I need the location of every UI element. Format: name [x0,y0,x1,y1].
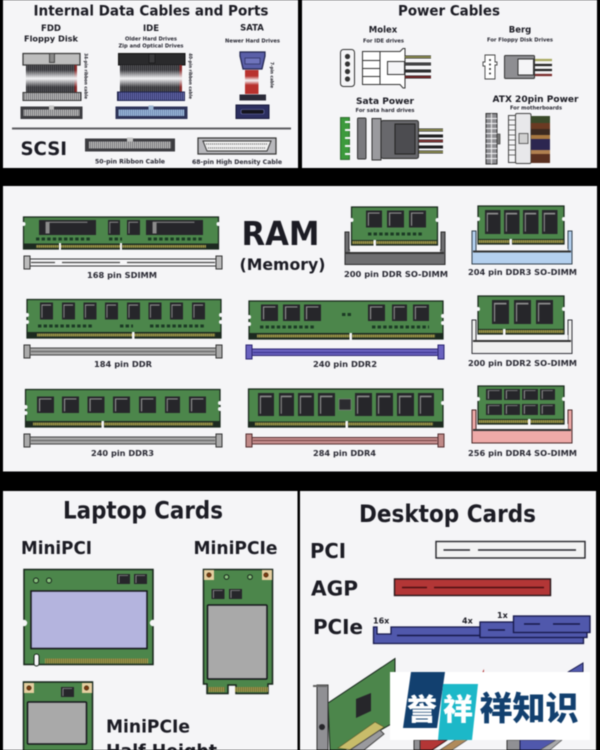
SATA cable and port [236,52,269,118]
card: MiniPCI [21,570,156,666]
label: PCIe: PCIe [313,615,363,639]
logo mark: teal block: 祥 [443,694,473,727]
heading: RAM: RAM [242,214,320,253]
logo mark: blue block: 誉 [407,694,437,727]
card: MiniPCIe [204,570,272,694]
panel: desktop cards [300,491,596,750]
Sata Power labels [356,97,415,114]
Berg labels: For Floppy Disk Drives [487,38,554,44]
ATX labels [492,95,579,112]
FDD cable and port [20,54,82,119]
label: 200 pin DDR2 SO-DIMM: 200 pin DDR2 SO-DIMM [468,359,577,368]
SCSI 50-pin connector [85,138,175,152]
FDD labels [24,24,79,44]
RAM: 168 pin SDIMM [22,217,222,269]
ATX connector [486,114,550,164]
SATA cable note: 7-pin cable [270,62,274,88]
panel: RAM memory [3,186,597,472]
slot: AGP [394,579,550,596]
SATA labels [225,24,281,44]
RAM: 184 pin DDR [24,300,223,358]
watermark logo [390,672,590,740]
label: 16x: 16x [373,616,390,626]
label: AGP: AGP [311,576,358,600]
FDD labels: Floppy Disk [24,34,79,44]
RAM: 240 pin DDR3 [24,390,222,447]
logo mark: teal block [438,684,478,740]
Molex labels: For IDE drives [363,38,405,44]
Molex labels [363,26,405,44]
heading: desktop cards: Desktop Cards [359,500,536,528]
IDE labels [118,24,184,50]
ATX labels: ATX 20pin Power [492,95,579,105]
Sata Power connector [340,118,443,160]
RAM: 204 pin DDR3 SO-DIMM [472,206,572,264]
Sata Power labels: Sata Power [356,97,415,107]
illustration: AGP graphics card [414,669,484,750]
label: MiniPCIe half height: MiniPCIe [106,716,190,738]
IDE labels: Zip and Optical Drives [118,44,184,50]
Berg connector [483,55,552,79]
label: 256 pin DDR4 SO-DIMM: 256 pin DDR4 SO-DIMM [468,449,577,458]
label: MiniPCIe: MiniPCIe [194,538,278,559]
label: PCI: PCI [310,539,346,563]
SCSI heading: SCSI [20,138,67,160]
RAM: 240 pin DDR2 [246,301,445,359]
label: 204 pin DDR3 SO-DIMM: 204 pin DDR3 SO-DIMM [468,268,577,277]
label: MiniPCI: MiniPCI [21,538,92,559]
IDE cable note: 40-pin ribbon cable [188,53,193,99]
RAM: 200 pin DDR SO-DIMM [345,207,445,264]
label: 4x: 4x [462,616,474,626]
card: MiniPCIe half height [24,682,92,750]
panel: power cables [302,0,597,168]
RAM: 284 pin DDR4 [246,389,445,447]
label: 240 pin DDR3: 240 pin DDR3 [91,449,154,458]
subheading: Memory: (Memory) [240,255,326,274]
logo mark: blue block [403,672,445,728]
Molex connector [340,48,431,88]
SCSI 68-pin label: 68-pin High Density Cable [192,159,282,166]
ATX labels: For motherboards [510,106,563,112]
panel: laptop cards [3,491,298,750]
label: MiniPCIe half height [106,716,217,750]
RAM: 256 pin DDR4 SO-DIMM [472,386,572,443]
SCSI 50-pin label: 50-pin Ribbon Cable [95,158,165,166]
logo wordmark: 祥知识 [480,690,578,727]
IDE labels: IDE [143,24,159,34]
Berg labels: Berg [509,26,531,36]
label: 1x: 1x [497,611,509,620]
panel: internal data cables and ports [3,0,298,168]
IDE cable and port [116,54,188,119]
SCSI 68-pin connector [198,138,276,154]
SATA labels: SATA [240,24,264,34]
Molex labels: Molex [369,26,398,36]
slot: PCIe 16x, 4x and 1x [374,616,590,644]
FDD cable note: 34-pin ribbon cable [84,53,88,99]
FDD labels: FDD [41,24,61,34]
heading: laptop cards: Laptop Cards [63,496,223,524]
label: 168 pin SDIMM: 168 pin SDIMM [87,271,157,280]
heading: internal data cables: Internal Data Cables and Ports [34,4,268,20]
illustration: PCI network card [313,658,395,750]
SATA labels: Newer Hard Drives [225,38,281,44]
label: 240 pin DDR2: 240 pin DDR2 [313,360,377,369]
Berg labels [487,26,554,44]
illustration: PCIe graphics card [507,663,583,750]
label: 184 pin DDR: 184 pin DDR [94,360,152,369]
heading: power cables: Power Cables [398,4,500,20]
Sata Power labels: For sata hard drives [356,108,415,114]
label: 284 pin DDR4: 284 pin DDR4 [313,449,376,458]
slot: PCI [436,542,585,558]
IDE labels: Older Hard Drives [125,36,178,42]
RAM: 200 pin DDR2 SO-DIMM [472,296,572,354]
label: 200 pin DDR SO-DIMM: 200 pin DDR SO-DIMM [344,270,448,279]
